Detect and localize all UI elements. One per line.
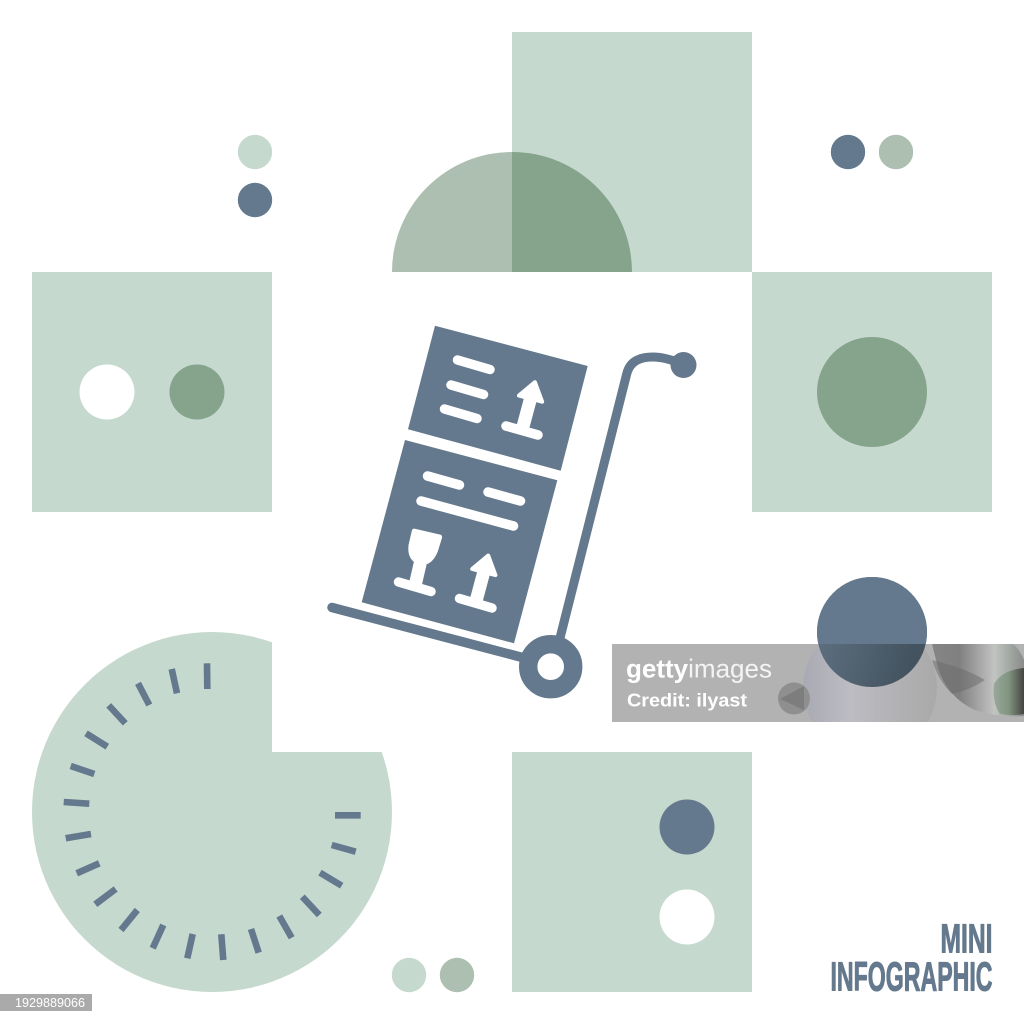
panel: left square with two circles [32,272,272,512]
lower box up arrow [460,552,500,608]
semicircle overlapping top square [392,152,632,272]
watermark bubbles [804,644,1024,722]
lower box [362,440,557,643]
image id tag: 1929889066 [15,996,85,1010]
truck platform [332,608,530,660]
truck handle [560,357,680,638]
dots: top left pair [238,135,272,217]
panel: bottom square with two circles [512,752,752,992]
watermark wordmark: gettyimages [626,654,772,684]
icon: hand truck with boxes [332,326,696,689]
image id tag [0,994,92,1011]
title: mini infographic [830,916,992,1000]
panel: right square with circle [752,272,992,512]
dots: top right pair [831,135,913,169]
upper box up arrow [506,379,547,435]
lower box label lines [421,476,520,526]
handle grip [670,352,696,378]
tick marks [64,663,361,960]
panel: top square [512,32,752,272]
upper box [408,326,588,471]
slate circle over watermark [817,577,927,687]
dial: notched circle with tick marks [32,632,392,992]
truck wheel [528,644,573,689]
fragile glass symbol [398,528,443,592]
watermark small circle [778,682,810,714]
upper box label lines [444,360,490,418]
dots: bottom pair [392,958,474,992]
watermark credit: Credit: ilyast [627,690,747,710]
watermark: getty images banner [612,644,1024,722]
